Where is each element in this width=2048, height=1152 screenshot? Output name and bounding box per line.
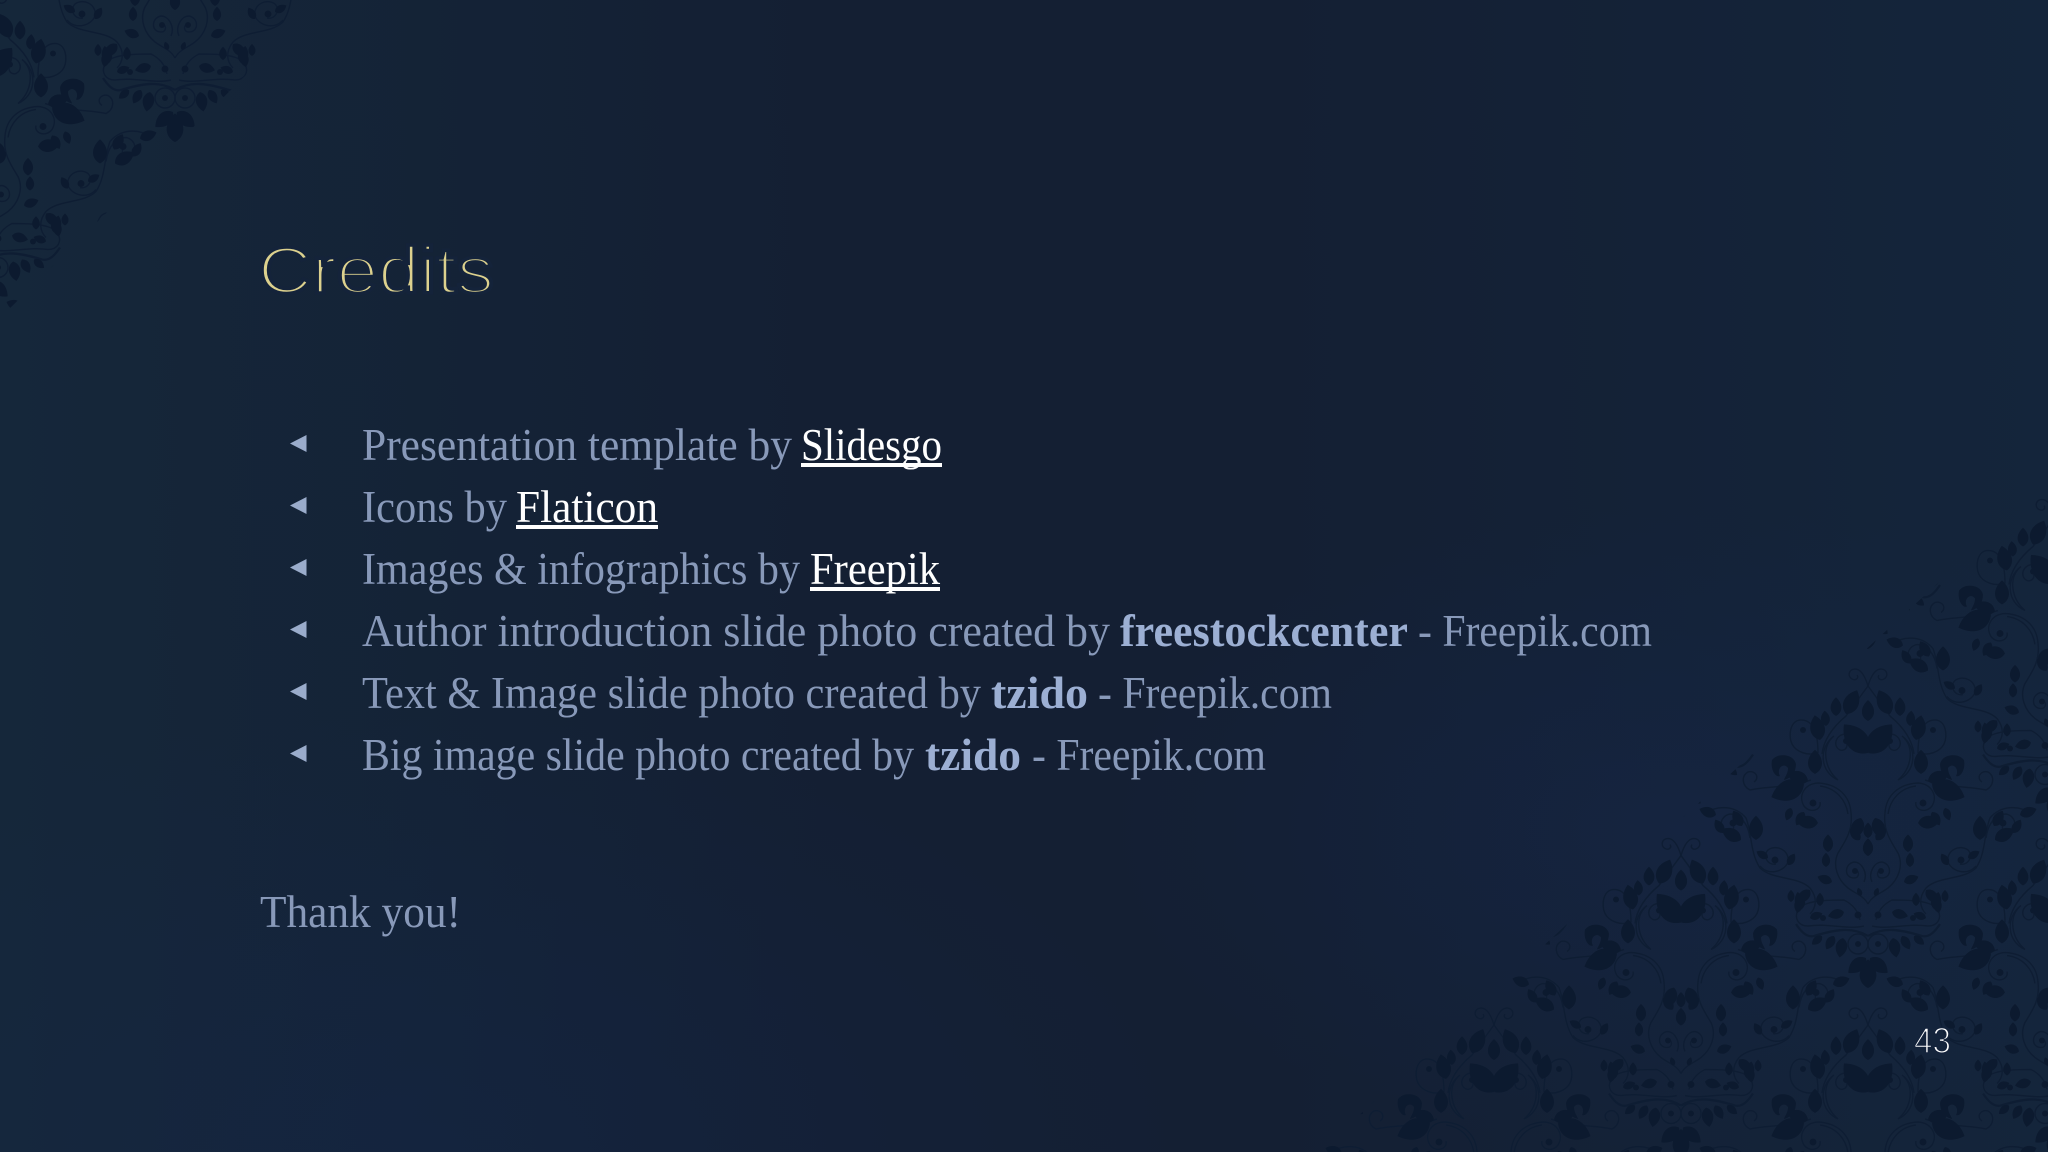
ornament: top-left damask <box>0 0 322 318</box>
item: icons credit: Flaticon <box>516 482 658 532</box>
item: images credit: Images & infographics by <box>362 544 800 594</box>
title: Credits <box>258 233 494 307</box>
item: big image photo credit: tzido <box>925 730 1021 780</box>
item: template credit: Presentation template by <box>362 420 792 470</box>
ornament: bottom-right damask <box>1319 482 2048 1152</box>
page number: 43 <box>1914 1020 1951 1061</box>
thank you text: Thank you! <box>260 887 461 937</box>
item: images credit: Freepik <box>810 544 940 594</box>
item: author photo credit: Author introduction slide photo created by <box>362 606 1110 656</box>
item: text and image photo credit: tzido <box>991 668 1088 718</box>
item: template credit: Slidesgo <box>801 420 942 470</box>
item: author photo credit: - Freepik.com <box>1418 606 1652 656</box>
item: icons credit: Icons by <box>362 482 507 532</box>
item: big image photo credit <box>290 730 1266 780</box>
item: text and image photo credit: - Freepik.com <box>1098 668 1332 718</box>
item: big image photo credit: - Freepik.com <box>1032 730 1266 780</box>
item: icons credit <box>290 482 658 532</box>
item: text and image photo credit <box>290 668 1332 718</box>
item: author photo credit <box>290 606 1652 656</box>
item: template credit <box>290 420 942 470</box>
item: text and image photo credit: Text & Image slide photo created by <box>362 668 981 718</box>
item: author photo credit: freestockcenter <box>1120 606 1408 656</box>
bullet list <box>290 420 1652 780</box>
item: big image photo credit: Big image slide photo created by <box>362 730 914 780</box>
